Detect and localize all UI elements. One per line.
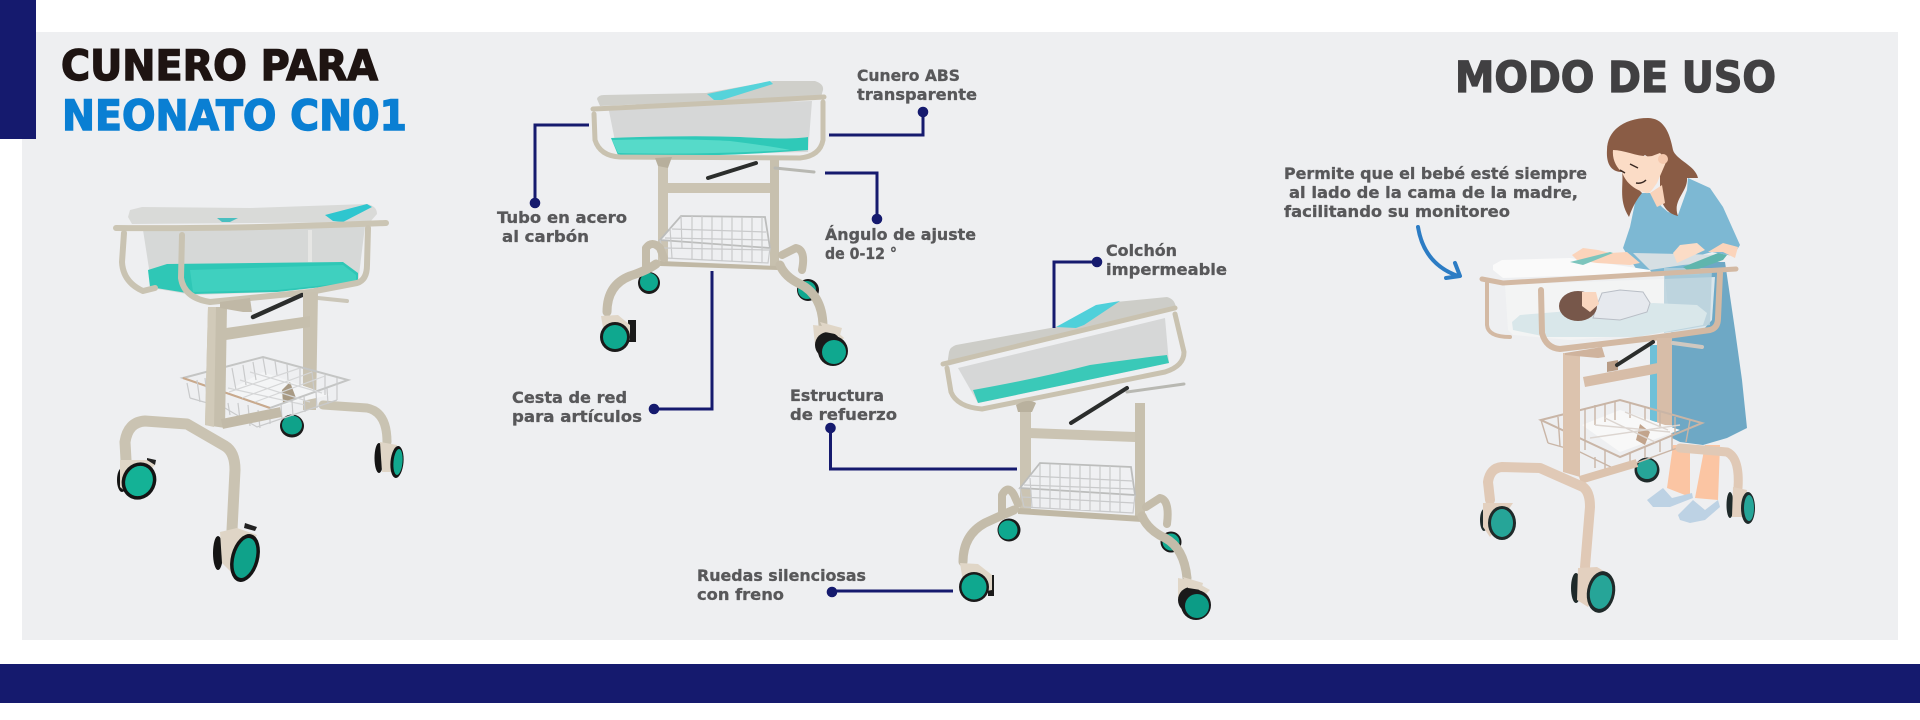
- illustration: mother with baby in crib: [1480, 118, 1755, 615]
- handle: [325, 204, 372, 222]
- callout: Ruedas silenciosas con freno: Ruedas silenciosas: [697, 566, 866, 585]
- rails: [116, 223, 386, 228]
- right leg: [323, 405, 387, 442]
- callout: Cunero ABS transparente: transparente: [857, 85, 977, 104]
- left column: [205, 307, 227, 428]
- product photo: crib front view: [593, 81, 848, 366]
- rear wheels: [998, 518, 1020, 542]
- front wheels: [988, 575, 994, 596]
- callout: Colchon impermeable: impermeable: [1106, 260, 1227, 279]
- callout: Colchon impermeable: Colchón: [1106, 241, 1177, 260]
- navy footer band: [0, 664, 1920, 703]
- basin: [1505, 277, 1715, 340]
- front legs: [125, 421, 235, 530]
- torso and sleeves: [1623, 178, 1740, 275]
- text block: usage description: [1284, 164, 1587, 221]
- slippers: [1647, 488, 1693, 507]
- heading: modo de uso: MODO DE USO: [1455, 54, 1776, 103]
- callout: Ruedas silenciosas con freno: con freno: [697, 585, 784, 604]
- left wheel: [117, 468, 127, 492]
- navy corner block: [0, 0, 36, 139]
- base: [1580, 463, 1637, 480]
- callout: Angulo de ajuste: Ángulo de ajuste: [825, 225, 976, 244]
- eyes and mouth: [1620, 164, 1646, 183]
- callout: Angulo de ajuste: de 0-12 °: [825, 244, 897, 263]
- rails: [1482, 269, 1736, 283]
- wheels: [1480, 487, 1755, 615]
- title: NEONATO CN01: [62, 91, 407, 140]
- basin: [958, 318, 1169, 403]
- right column, crossbar: [303, 292, 318, 410]
- title: CUNERO PARA: [61, 41, 378, 90]
- cyan edge behind column: [1650, 345, 1658, 422]
- mattress: [1512, 303, 1707, 337]
- handle: [1056, 301, 1120, 328]
- front wheels: [628, 320, 636, 342]
- callout: Cesta de red: Cesta de red: [512, 388, 627, 407]
- arrow: curved blue pointer: [1418, 227, 1460, 278]
- front wheel: [244, 523, 257, 531]
- callout: Colchon impermeable: [1054, 241, 1227, 328]
- basket: [660, 216, 770, 263]
- legs: [1002, 490, 1018, 513]
- text block: usage description: al lado de la cama de la madre,: [1289, 183, 1578, 202]
- callout: Ruedas silenciosas con freno: [697, 566, 953, 604]
- neck: [1650, 185, 1665, 207]
- callout: Tubo en acero al carbon: [497, 125, 627, 246]
- callout: Tubo en acero al carbon: Tubo en acero: [497, 208, 627, 227]
- product photo: crib tilted view: [943, 297, 1211, 620]
- base beam: [222, 412, 281, 424]
- mattress: [148, 262, 358, 294]
- rear wheels: [638, 272, 660, 294]
- stand: [1657, 338, 1672, 425]
- face: [1613, 150, 1667, 193]
- handle: [707, 81, 773, 100]
- callout: Cesta de red: [512, 271, 712, 426]
- ear: [1658, 154, 1668, 164]
- callout: Angulo de ajuste: [825, 173, 976, 263]
- lid: [1493, 258, 1652, 278]
- lid: [597, 81, 823, 106]
- legs: [646, 244, 664, 268]
- title: [61, 41, 407, 140]
- text block: usage description: facilitando su monitoreo: [1284, 202, 1510, 221]
- callout: Cesta de red: para artículos: [512, 407, 642, 426]
- arms and hands: [1572, 248, 1640, 265]
- callout: Tubo en acero al carbon: al carbón: [502, 227, 589, 246]
- callout: Estructura de refuerzo: de refuerzo: [790, 405, 897, 424]
- handles: [1683, 253, 1727, 272]
- left column: [1563, 353, 1580, 477]
- hair: [1607, 118, 1698, 217]
- text block: usage description: Permite que el bebé esté siempre: [1284, 164, 1587, 183]
- gas spring and handle: [318, 298, 347, 301]
- callout: Cunero ABS transparente: [829, 66, 977, 135]
- basket: [183, 357, 348, 428]
- lid: [128, 204, 377, 224]
- lid: [947, 297, 1176, 366]
- skirt: [1663, 262, 1747, 445]
- product photo: crib three-quarter view: [116, 204, 405, 585]
- rails: [943, 308, 1175, 364]
- stand: [1020, 410, 1031, 513]
- rails: [593, 97, 824, 109]
- stand: [658, 158, 668, 265]
- basin: [143, 226, 365, 295]
- basin: [608, 101, 812, 156]
- right wheel: [374, 443, 384, 473]
- wheels: [116, 442, 405, 585]
- basket: [1541, 400, 1702, 470]
- callout: Estructura de refuerzo: Estructura: [790, 386, 884, 405]
- callout: Estructura de refuerzo: [790, 386, 1017, 469]
- back wheel: [280, 414, 304, 438]
- baby: [1559, 290, 1650, 321]
- back wheel: [1634, 458, 1660, 482]
- legs: [1667, 445, 1690, 497]
- callout: Cunero ABS transparente: Cunero ABS: [857, 66, 960, 85]
- basket: [1020, 463, 1135, 513]
